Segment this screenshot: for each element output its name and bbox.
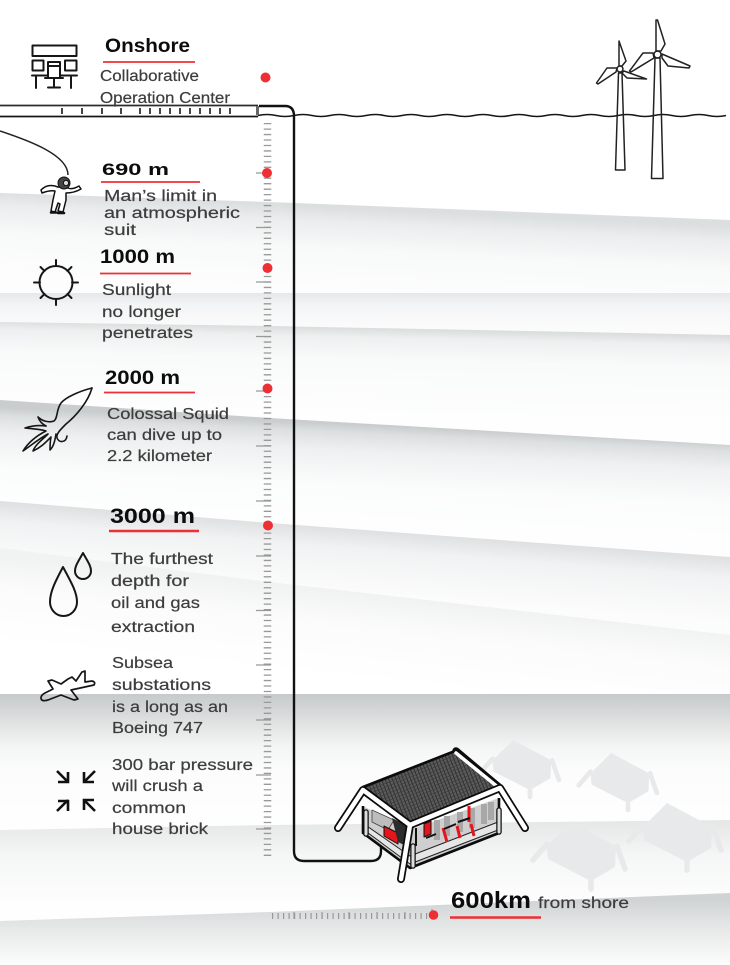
text block: 2000 m: Colossal Squid: [107, 406, 229, 423]
text block: 3000 m: depth for: [111, 573, 189, 590]
depth ruler: [256, 123, 271, 858]
text block: 690 m: 690 m: [102, 160, 169, 179]
text block: Subsea substations: Subsea: [112, 655, 173, 672]
text block: pressure: house brick: [112, 821, 208, 838]
text block: 600km from shore: from shore: [538, 895, 629, 912]
text block: pressure: [111, 757, 253, 838]
text block: 600km from shore: [450, 887, 629, 918]
text block: Subsea substations: is a long as an: [112, 699, 228, 716]
text block: Subsea substations: substations: [112, 677, 211, 694]
onshore platform: [0, 106, 258, 115]
text block: 1000 m: penetrates: [102, 325, 193, 342]
substation frame: [338, 788, 525, 879]
text block: 690 m: [101, 160, 240, 239]
text block: 2000 m: 2.2 kilometer: [107, 448, 212, 465]
depth markers: [260, 72, 273, 530]
text block: 3000 m: The furthest: [111, 551, 214, 568]
distance marker: [429, 910, 438, 920]
text block: 1000 m: no longer: [102, 304, 181, 321]
text block: 3000 m: 3000 m: [110, 505, 195, 528]
heading: Onshore: [100, 36, 230, 107]
cable: [259, 106, 381, 861]
text block: 690 m: suit: [104, 222, 137, 239]
icon: subsea substation: [338, 751, 525, 879]
substation roof: [363, 751, 500, 825]
distance ruler: [272, 909, 432, 919]
text block: 690 m: an atmospheric: [104, 205, 240, 222]
substation back strut: [456, 751, 500, 788]
text block: 600km from shore: 600km: [451, 887, 531, 913]
text block: 2000 m: can dive up to: [107, 427, 222, 444]
text block: 3000 m: [109, 505, 214, 636]
icon: distant substations: [481, 740, 721, 889]
text block: 1000 m: 1000 m: [100, 247, 175, 268]
text block: 1000 m: Sunlight: [102, 282, 172, 299]
text block: 1000 m: [100, 247, 193, 342]
text block: Subsea substations: [112, 655, 228, 737]
icon: pressure arrows: [57, 771, 95, 811]
text block: 690 m: Man’s limit in: [104, 188, 217, 205]
icon: control room: [32, 46, 77, 88]
icon: airplane: [41, 671, 95, 701]
text block: pressure: 300 bar pressure: [112, 757, 253, 774]
text block: 3000 m: extraction: [111, 619, 195, 636]
sea surface line: [0, 114, 726, 116]
icon: diver with tether: [0, 131, 81, 213]
text block: Subsea substations: Boeing 747: [112, 720, 203, 737]
icon: wind turbines: [596, 20, 690, 178]
icon: sun: [34, 260, 78, 305]
text block: 2000 m: [104, 368, 229, 465]
heading: Onshore: Operation Center: [100, 90, 230, 107]
icon: colossal squid: [23, 388, 92, 451]
heading: Onshore: Onshore: [105, 36, 190, 57]
substation tray: [363, 798, 499, 868]
heading: Onshore: Collaborative: [100, 68, 199, 85]
icon: oil drops: [50, 553, 91, 616]
text block: 3000 m: oil and gas: [111, 595, 200, 612]
text block: pressure: will crush a: [111, 778, 203, 795]
text block: 2000 m: 2000 m: [105, 368, 180, 389]
text block: pressure: common: [112, 800, 186, 817]
